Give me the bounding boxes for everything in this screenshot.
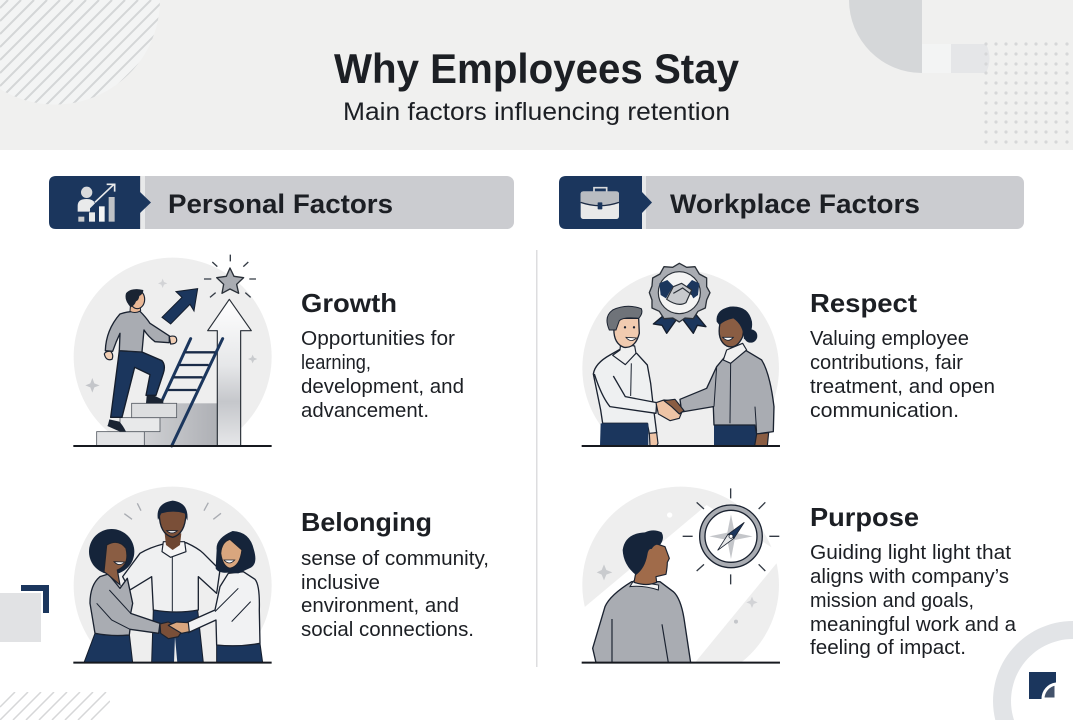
heading: Purpose [810,502,919,532]
heading: Belonging [301,507,432,537]
description: mission and goals, [810,590,974,612]
description: Opportunities for [301,328,455,350]
description: environment, and [301,595,459,617]
header band [0,0,1073,150]
description [301,548,489,641]
description: contributions, fair [810,352,963,374]
description: aligns with company’s [810,566,1009,588]
description: meaningful work and a [810,614,1017,636]
description: feeling of impact. [810,637,966,659]
illustration: person looking at compass [582,486,780,664]
decoration: bottom-left stripes [0,692,110,720]
heading text: Workplace Factors [670,189,920,219]
subtitle: Main factors influencing retention [343,98,730,126]
description: social connections. [301,619,474,641]
panel: growth [73,255,464,456]
description [301,328,464,422]
column divider [536,250,538,667]
description: communication. [810,400,959,422]
panel: belonging [73,486,488,664]
description: Guiding light light that [810,542,1011,564]
illustration: person climbing stairs [73,255,272,456]
icon: person with rising chart [78,184,115,222]
decoration: bottom-left square and corner [0,585,49,642]
panel heading: personal factors [49,176,514,229]
title: Why Employees Stay [334,45,740,92]
description [810,542,1017,659]
heading: Growth [301,288,397,318]
decoration: bottom-right ring and logo square [993,621,1073,720]
description: inclusive [301,572,380,594]
description: learning, [301,352,371,374]
description: development, and [301,376,464,398]
description: treatment, and open [810,376,995,398]
description: advancement. [301,400,429,422]
panel: purpose [582,486,1016,664]
icon: briefcase [581,188,619,219]
description: Valuing employee [810,328,969,350]
panel: respect [582,263,995,467]
heading text: Personal Factors [168,189,393,219]
illustration: three colleagues joining hands [73,486,272,664]
heading: Respect [810,288,917,318]
panel heading: workplace factors [559,176,1024,229]
description [810,328,995,422]
description: sense of community, [301,548,489,570]
illustration: handshake with award badge [582,263,780,467]
